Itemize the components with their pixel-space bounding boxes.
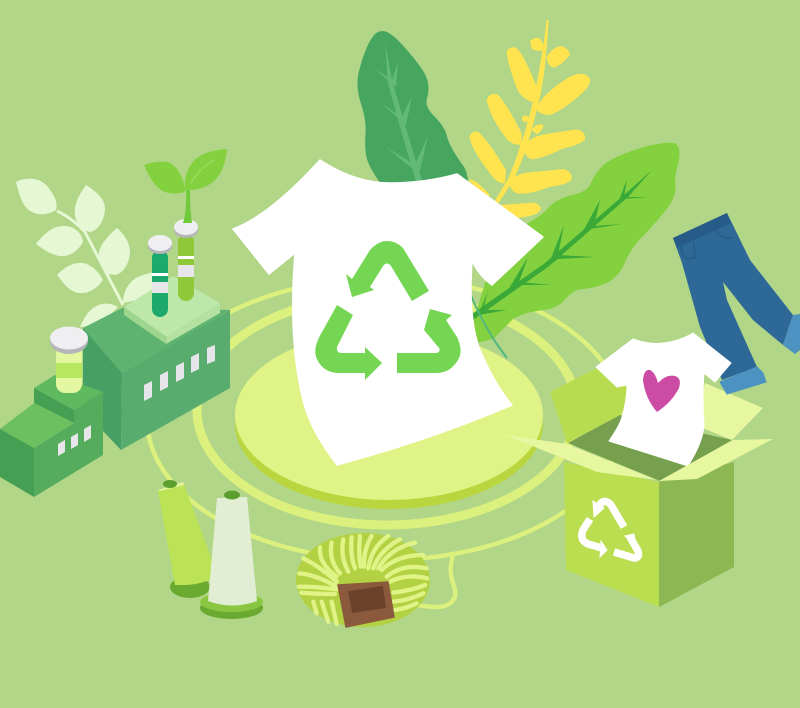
chimney: lime [174, 219, 198, 301]
heart [643, 370, 680, 412]
white branch [16, 179, 160, 327]
platform disc [235, 330, 543, 509]
light green leaf [468, 144, 678, 358]
box front flaps [505, 435, 773, 481]
small factory [0, 375, 103, 497]
box right face [659, 462, 734, 607]
factory windows [144, 345, 215, 401]
yarn ball [296, 533, 430, 627]
small factory windows [58, 425, 91, 456]
sprout [144, 149, 227, 223]
roof pad [124, 276, 220, 344]
yarn label [338, 582, 394, 627]
cardboard box [550, 368, 763, 607]
recycle symbol on shirt [315, 241, 461, 380]
small t-shirt [596, 333, 731, 466]
concentric rings [147, 278, 623, 607]
box interior and back flaps [550, 368, 763, 481]
yellow fern [468, 20, 590, 218]
main t-shirt [233, 160, 543, 465]
box left face [564, 462, 659, 607]
jeans [673, 213, 800, 394]
large factory [83, 276, 230, 450]
recycle symbol on box [582, 501, 638, 558]
waistband [673, 213, 731, 248]
dark green leaf [359, 32, 467, 190]
chimney: green [148, 235, 172, 317]
yarn spool: white [200, 490, 263, 619]
yarn spool: lime [158, 480, 212, 598]
chimney: small factory [50, 326, 88, 393]
cuffs [783, 314, 800, 354]
